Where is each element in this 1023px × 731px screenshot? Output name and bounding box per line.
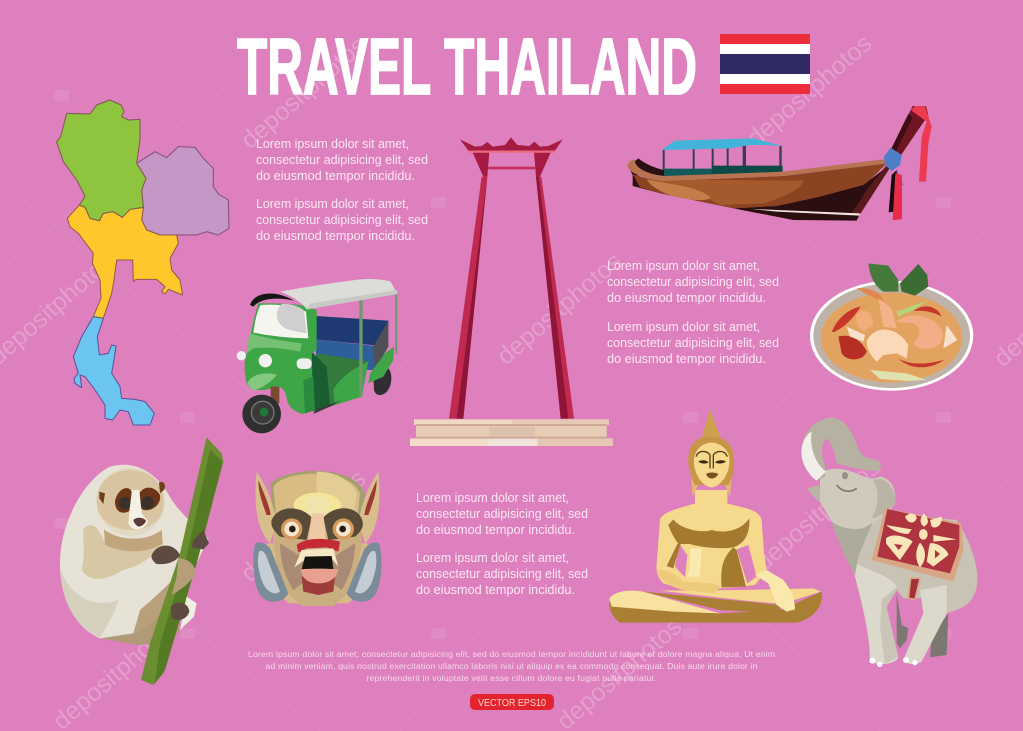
watermarks: depositphotos bbox=[236, 31, 371, 155]
text block: top left: consectetur adipisicing elit, sed bbox=[256, 212, 428, 227]
icon: elephant with red blanket bbox=[801, 417, 977, 667]
icon: Thai mask bbox=[253, 471, 381, 606]
watermarks: depositphotos bbox=[742, 29, 877, 153]
text block: top left bbox=[256, 136, 428, 243]
text block: lower centre: do eiusmod tempor incididu. bbox=[416, 522, 575, 537]
icon: giant swing bbox=[410, 137, 613, 446]
text block: middle right: consectetur adipisicing elit, sed bbox=[607, 335, 779, 350]
footer text bbox=[248, 649, 775, 683]
icon: slow loris on branch bbox=[60, 437, 223, 685]
text block: top left: Lorem ipsum dolor sit amet, bbox=[256, 136, 409, 151]
text block: top left: Lorem ipsum dolor sit amet, bbox=[256, 196, 409, 211]
icon: Thai flag bbox=[720, 34, 810, 94]
badge: vector eps10 bbox=[470, 694, 554, 710]
text block: lower centre bbox=[416, 490, 588, 597]
watermarks: depositphotos bbox=[750, 453, 885, 577]
map of Thailand bbox=[57, 100, 229, 425]
text block: top left: do eiusmod tempor incididu. bbox=[256, 228, 415, 243]
text block: lower centre: consectetur adipisicing elit, sed bbox=[416, 506, 588, 521]
watermarks: depositphotos bbox=[492, 247, 627, 371]
badge: vector eps10: VECTOR EPS10 bbox=[478, 698, 546, 709]
text block: lower centre: Lorem ipsum dolor sit amet, bbox=[416, 550, 569, 565]
title: TRAVEL THAILAND bbox=[237, 22, 697, 111]
text block: lower centre: Lorem ipsum dolor sit amet, bbox=[416, 490, 569, 505]
icon: tuk tuk bbox=[237, 279, 397, 433]
footer text: ad minim veniam, quis nostrud exercitation ullamco laboris nisi ut aliquip ex ea commodo consequat. Duis aute irure dolor in bbox=[266, 661, 758, 671]
text block: lower centre: consectetur adipisicing elit, sed bbox=[416, 566, 588, 581]
watermarks: depositphotos bbox=[236, 464, 371, 588]
text block: middle right: do eiusmod tempor incididu. bbox=[607, 351, 766, 366]
text block: middle right bbox=[607, 258, 779, 366]
text block: middle right: Lorem ipsum dolor sit amet, bbox=[607, 319, 760, 334]
icon: seated golden Buddha bbox=[609, 409, 822, 623]
text block: middle right: Lorem ipsum dolor sit amet, bbox=[607, 258, 760, 273]
text block: middle right: consectetur adipisicing elit, sed bbox=[607, 274, 779, 289]
icon: long-tail boat bbox=[627, 106, 932, 221]
footer text: reprehenderit in voluptate velit esse cillum dolore eu fugiat nulla pariatur. bbox=[366, 673, 656, 683]
text block: lower centre: do eiusmod tempor incididu. bbox=[416, 582, 575, 597]
footer text: Lorem ipsum dolor sit amet, consectetur adipisicing elit, sed do eiusmod tempor incididunt ut labore et dolore magna aliqua. Ut enim bbox=[248, 649, 775, 659]
icon: tom yum soup bowl bbox=[810, 263, 973, 391]
text block: middle right: do eiusmod tempor incididu. bbox=[607, 290, 766, 305]
text block: top left: consectetur adipisicing elit, sed bbox=[256, 152, 428, 167]
text block: top left: do eiusmod tempor incididu. bbox=[256, 168, 415, 183]
